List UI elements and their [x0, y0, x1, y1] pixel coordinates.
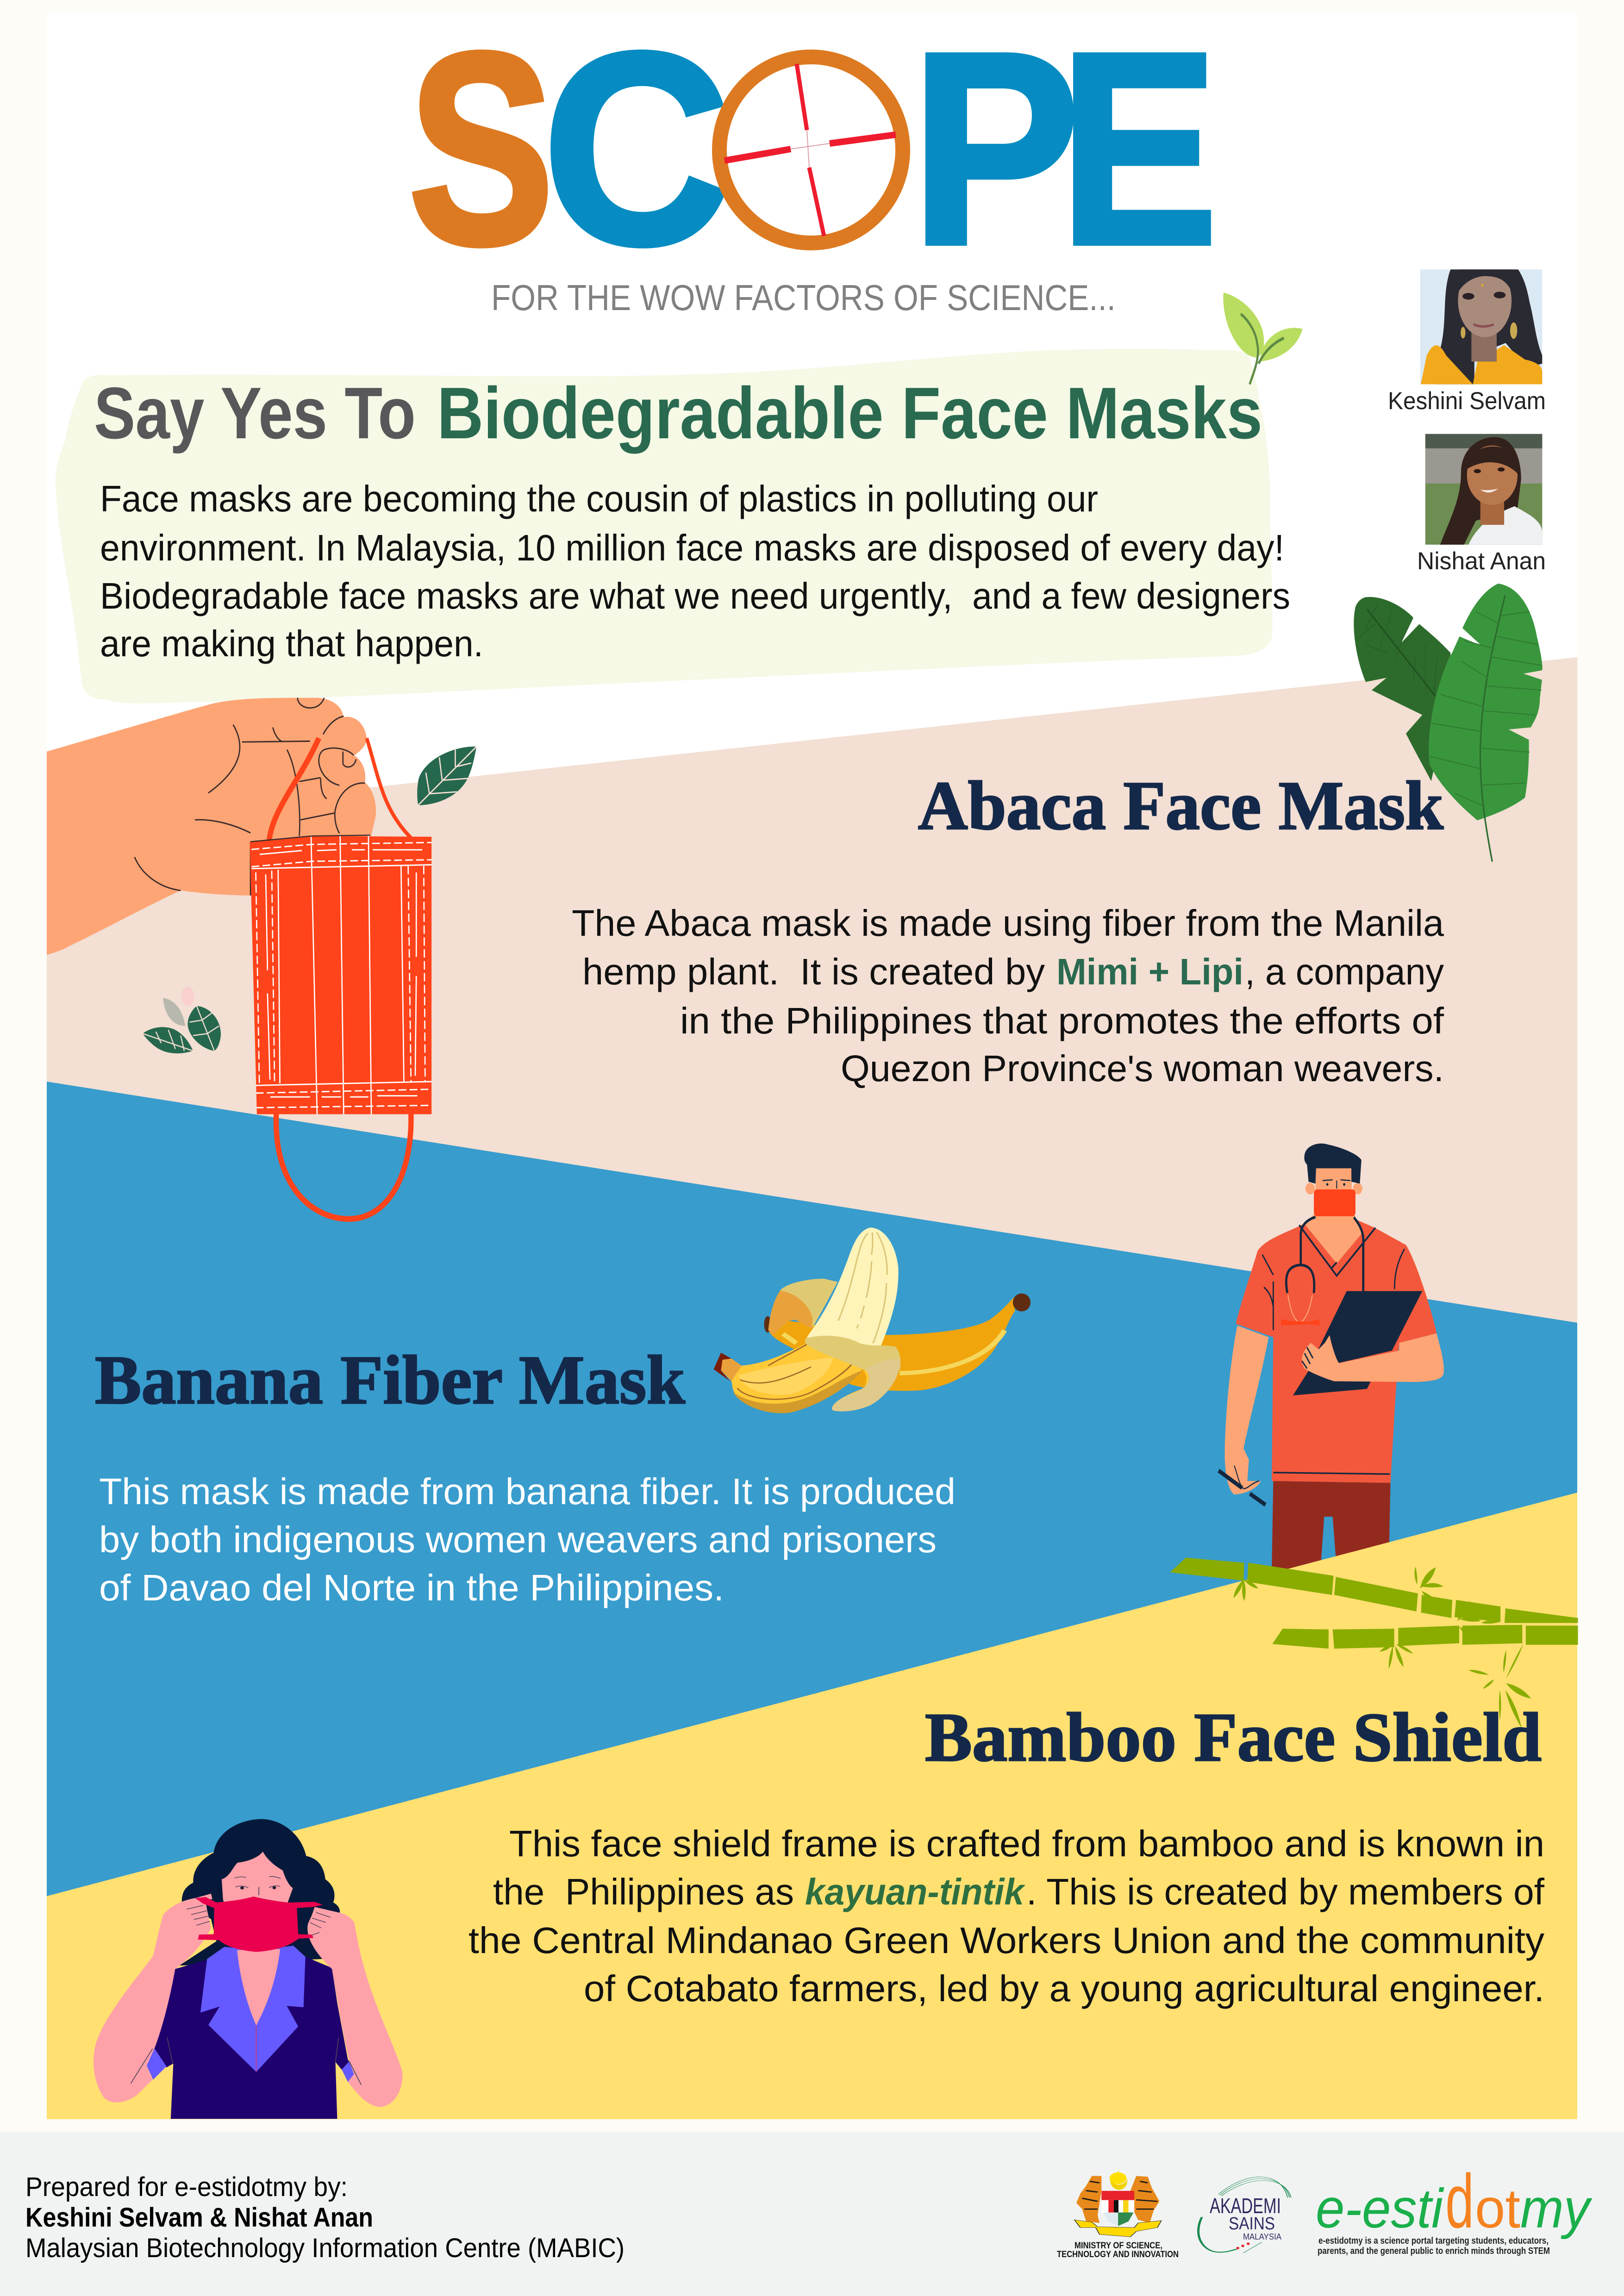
text: abaca body: The Abaca mask is made using fiber from the Manila — [572, 902, 1444, 944]
section: abaca — [572, 767, 1444, 1089]
icon: sprout — [1223, 292, 1303, 384]
logo: ministry crest: MINISTRY OF SCIENCE, — [1074, 2241, 1162, 2251]
footer band — [0, 2132, 1624, 2296]
heading: banana: Banana Fiber Mask — [95, 1342, 686, 1419]
text: bamboo body — [468, 1823, 1545, 2009]
logo: SCOPE: E — [1060, 0, 1218, 301]
illustration: green title sprout blob — [56, 349, 1272, 703]
intro text: environment. In Malaysia, 10 million face masks are disposed of every day! — [100, 527, 1284, 568]
text: bamboo body: the Central Mindanao Green Workers Union and the community — [468, 1920, 1544, 1961]
logo: e-estidotmy: e-esti — [1316, 2178, 1444, 2240]
panel: banana background — [47, 1082, 1577, 1898]
panel: bamboo background — [47, 1493, 1577, 2119]
title: Say Yes To — [94, 373, 416, 454]
logo: e-estidotmy: e-estidotmy is a science portal targeting students, educators, — [1318, 2236, 1549, 2246]
illustration: woman wearing mask — [94, 1819, 402, 2121]
panel: abaca background — [47, 657, 1577, 1324]
logo tagline: FOR THE WOW FACTORS OF SCIENCE... — [491, 277, 1116, 318]
logo: e-estidotmy: parents, and the general public to enrich minds through STEM — [1318, 2246, 1550, 2256]
photo: Keshini — [1420, 264, 1542, 384]
footer credits: Malaysian Biotechnology Information Centre (MABIC) — [25, 2233, 625, 2263]
hand — [47, 698, 376, 955]
author: Nishat Anan — [1417, 434, 1546, 575]
illustration: doctor — [1218, 1144, 1444, 1571]
text: bamboo body: . This is created by members of — [1026, 1871, 1545, 1912]
logo: SCOPE: S — [408, 0, 554, 301]
logo: SCOPE: C — [543, 0, 730, 301]
text: abaca body — [572, 902, 1444, 1089]
logo: SCOPE: P — [911, 0, 1080, 301]
text: abaca body: Mimi + Lipi — [1056, 951, 1243, 992]
footer credits: Keshini Selvam & Nishat Anan — [25, 2203, 373, 2233]
logo: Akademi Sains Malaysia — [1199, 2177, 1291, 2253]
intro text: Face masks are becoming the cousin of plastics in polluting our — [100, 478, 1098, 519]
text: bamboo body: of Cotabato farmers, led by a young agricultural engineer. — [584, 1968, 1544, 2009]
illustration: hand holding mask — [47, 698, 476, 1219]
text: abaca body: Quezon Province's woman weavers. — [841, 1048, 1444, 1089]
hand lines — [135, 698, 365, 896]
title: Biodegradable Face Masks — [437, 373, 1262, 454]
logo: Akademi Sains Malaysia: AKADEMI — [1210, 2194, 1281, 2218]
photo: Nishat — [1425, 434, 1542, 545]
logo: ministry crest: TECHNOLOGY AND INNOVATION — [1057, 2250, 1179, 2259]
heading: abaca: Abaca Face Mask — [918, 767, 1444, 844]
logo: SCOPE — [408, 0, 1218, 301]
leaf right — [417, 747, 476, 805]
logo: ministry crest — [1057, 2171, 1179, 2259]
text: abaca body: , a company — [1245, 951, 1444, 992]
section: bamboo — [468, 1699, 1545, 2009]
illustration: banana leaves — [1354, 584, 1543, 862]
mask loops — [269, 738, 411, 1219]
footer credits — [25, 2172, 625, 2263]
text: abaca body: in the Philippines that promotes the efforts of — [680, 1000, 1444, 1041]
text: banana body: This mask is made from banana fiber. It is produced — [99, 1471, 956, 1512]
name: Nishat: Nishat Anan — [1417, 548, 1546, 575]
section: banana — [95, 1342, 956, 1608]
logo: e-estidotmy: my — [1520, 2178, 1593, 2240]
text: banana body: by both indigenous women weavers and prisoners — [99, 1519, 937, 1560]
illustration: bamboo stalks — [1170, 1558, 1578, 1729]
logo O with crosshair — [719, 57, 903, 243]
leaves lower — [143, 987, 221, 1053]
text: abaca body: hemp plant. It is created by — [582, 951, 1045, 992]
footer credits: Prepared for e-estidotmy by: — [25, 2172, 348, 2202]
logo: e-estidotmy: d — [1445, 2159, 1474, 2244]
mask body — [250, 835, 431, 1114]
name: Keshini: Keshini Selvam — [1388, 387, 1546, 415]
intro text: are making that happen. — [100, 623, 483, 664]
text: bamboo body: kayuan-tintik — [805, 1871, 1025, 1912]
illustration: banana — [713, 1227, 1031, 1413]
intro text — [100, 478, 1290, 664]
logo: Akademi Sains Malaysia: SAINS — [1229, 2214, 1275, 2234]
logo: e-estidotmy — [1316, 2159, 1593, 2256]
intro text: Biodegradable face masks are what we need urgently, and a few designers — [100, 575, 1290, 616]
text: banana body — [99, 1471, 956, 1608]
logo: Akademi Sains Malaysia: MALAYSIA — [1243, 2232, 1281, 2241]
author: Keshini Selvam — [1388, 264, 1546, 415]
text: banana body: of Davao del Norte in the Philippines. — [99, 1567, 724, 1608]
title — [94, 373, 1262, 454]
logo: e-estidotmy: ot — [1475, 2178, 1520, 2240]
text: bamboo body: This face shield frame is crafted from bamboo and is known in — [509, 1823, 1544, 1864]
text: bamboo body: the Philippines as — [493, 1871, 794, 1912]
heading: bamboo: Bamboo Face Shield — [925, 1699, 1542, 1776]
